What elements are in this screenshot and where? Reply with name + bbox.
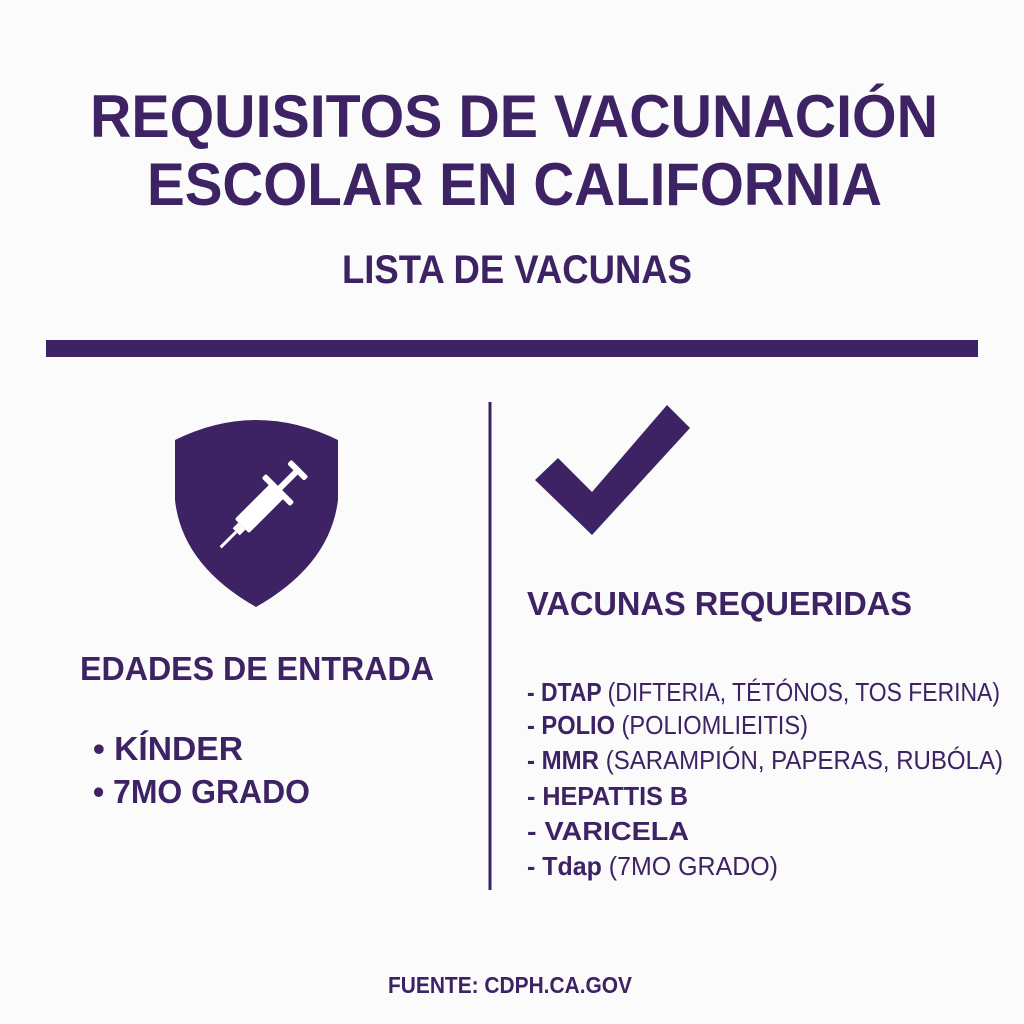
- title: REQUISITOS DE VACUNACIÓN: [90, 83, 938, 150]
- list: ages: [93, 730, 310, 810]
- list: vaccines: [527, 677, 1003, 881]
- title: ESCOLAR EN CALIFORNIA: [147, 151, 882, 218]
- list: vaccines: - POLIO (POLIOMLIEITIS): [527, 710, 808, 740]
- footer source: FUENTE: CDPH.CA.GOV: [388, 972, 633, 998]
- icon: check mark: [535, 405, 690, 535]
- list: ages: • KÍNDER: [93, 730, 243, 767]
- heading: edades de entrada: EDADES DE ENTRADA: [80, 650, 434, 687]
- list: vaccines: - MMR (SARAMPIÓN, PAPERAS, RUBÓLA): [527, 745, 1003, 775]
- list: vaccines: - HEPATTIS B: [527, 781, 688, 811]
- title: [90, 83, 938, 218]
- heading: vacunas requeridas: VACUNAS REQUERIDAS: [527, 585, 912, 622]
- list: vaccines: - Tdap (7MO GRADO): [527, 851, 778, 881]
- icon: shield with syringe: [175, 420, 338, 607]
- list: vaccines: - VARICELA: [527, 816, 689, 846]
- list: ages: • 7MO GRADO: [93, 773, 310, 810]
- subtitle: LISTA DE VACUNAS: [342, 248, 692, 292]
